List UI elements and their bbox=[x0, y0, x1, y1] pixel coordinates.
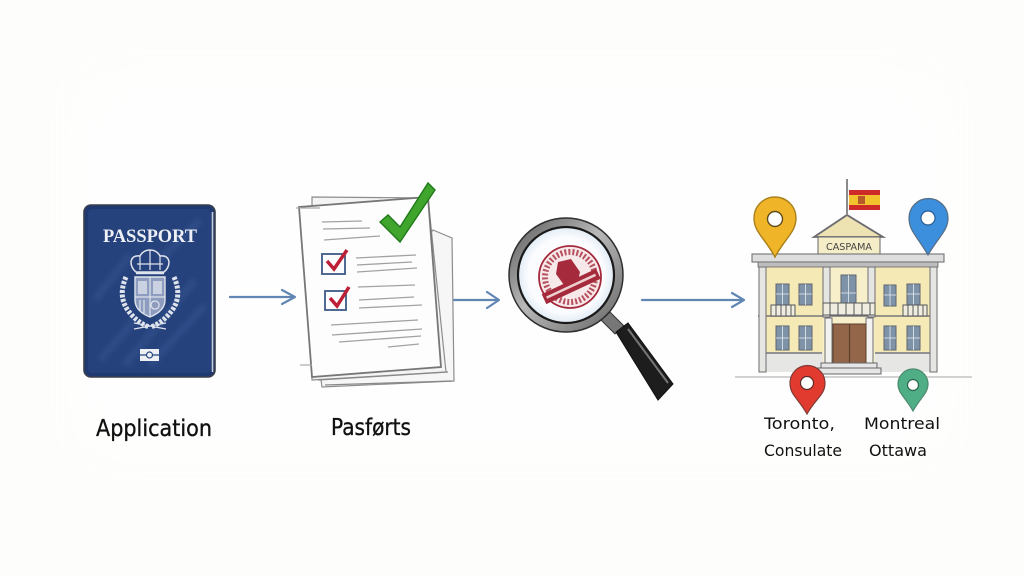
icon: passport cover bbox=[84, 205, 215, 377]
icon: consulate building bbox=[735, 215, 972, 377]
icon: yellow map pin bbox=[754, 197, 796, 257]
label: Toronto, Consulate: Consulate bbox=[764, 441, 842, 460]
step 1: passport bbox=[84, 205, 215, 442]
icon: checkbox two bbox=[325, 287, 349, 310]
cornice bbox=[752, 254, 944, 262]
label: Montreal Ottawa bbox=[864, 414, 940, 460]
label: Montreal Ottawa: Montreal bbox=[864, 414, 940, 433]
icon: blue map pin bbox=[909, 198, 948, 255]
label: Montreal Ottawa: Ottawa bbox=[869, 441, 927, 460]
sign text: CASPAMA bbox=[826, 242, 872, 253]
label: Application: Application bbox=[96, 416, 212, 442]
arrow: magnifier to consulate bbox=[642, 293, 744, 307]
icon: green check mark bbox=[380, 183, 435, 242]
columns bbox=[759, 267, 937, 372]
arrow: documents to magnifier bbox=[454, 292, 499, 308]
icon: magnifier handle bbox=[601, 312, 673, 400]
step 3: magnifying glass bbox=[509, 218, 673, 400]
pediment bbox=[814, 215, 883, 237]
ground line bbox=[735, 376, 972, 378]
icon: magnifier lens bbox=[509, 218, 623, 332]
icon: flag of Spain bbox=[847, 179, 880, 215]
icon: coat of arms bbox=[122, 250, 178, 329]
icon: biometric chip symbol bbox=[140, 349, 159, 361]
icon: checkbox one bbox=[322, 250, 347, 274]
balconies bbox=[771, 303, 927, 316]
building walls bbox=[759, 267, 936, 372]
icon: stack of papers bbox=[296, 197, 454, 387]
passport title: PASSPORT bbox=[103, 226, 197, 247]
arrow: passport to documents bbox=[230, 290, 295, 304]
windows bbox=[776, 275, 920, 350]
label: Toronto, Consulate bbox=[763, 414, 842, 460]
label: Pasførts: Pasførts bbox=[331, 415, 411, 441]
icon: red stamp bbox=[539, 246, 601, 308]
icon: green map pin bbox=[898, 369, 928, 411]
step 4: consulate bbox=[735, 179, 972, 460]
steps bbox=[816, 363, 881, 374]
text lines on the form bbox=[322, 221, 422, 347]
step 2: documents bbox=[296, 183, 454, 441]
door bbox=[833, 324, 866, 363]
window panes bbox=[776, 275, 920, 350]
label: Toronto, Consulate: Toronto, bbox=[763, 414, 835, 433]
icon: red map pin bbox=[790, 366, 825, 414]
